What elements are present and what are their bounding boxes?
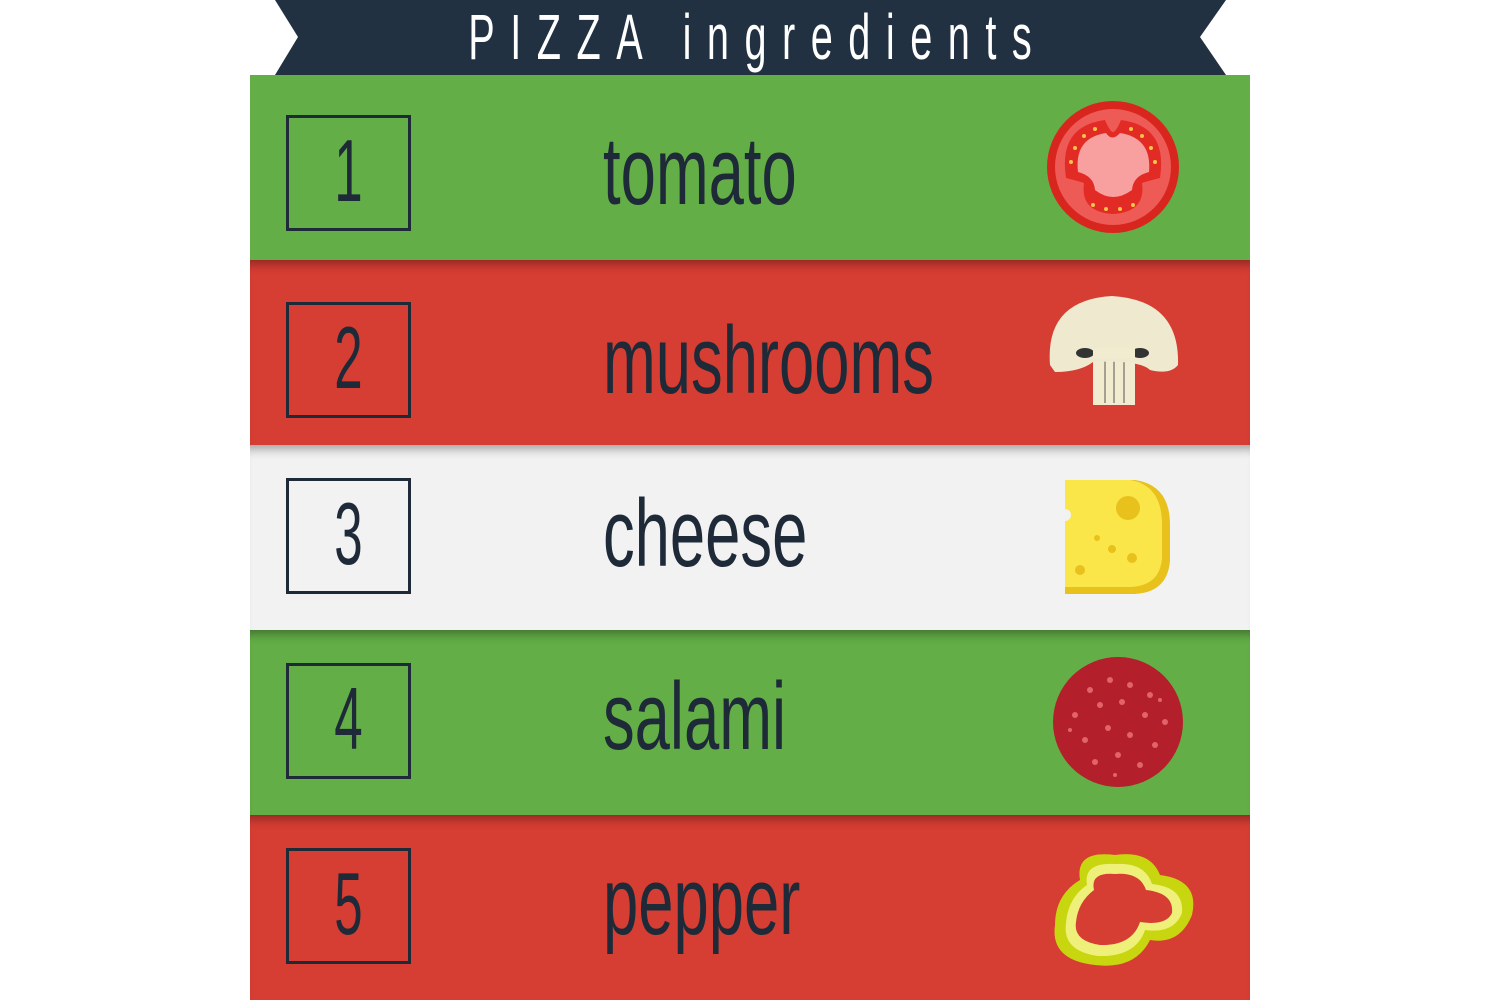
row 3: cheese [250, 445, 1250, 630]
label tomato: tomato [603, 118, 797, 225]
label salami: salami [603, 663, 786, 770]
title text: PIZZA ingredients [468, 1, 1047, 73]
number box 4 [286, 663, 411, 779]
label cheese: cheese [603, 480, 807, 587]
icon: tomato [1047, 101, 1179, 233]
title banner [275, 0, 1226, 75]
icon: mushroom [1050, 296, 1178, 405]
icon: cheese [1065, 480, 1170, 594]
row 2: mushrooms [250, 260, 1250, 445]
number box 3 [286, 478, 411, 594]
label pepper: pepper [603, 848, 800, 955]
row 4: salami [250, 630, 1250, 815]
icon: salami [1053, 657, 1183, 787]
row 5: pepper [250, 815, 1250, 1000]
number box 5 [286, 848, 411, 964]
number box 1: 1 [334, 121, 363, 220]
icon: pepper [1054, 854, 1194, 966]
label mushrooms: mushrooms [603, 307, 934, 414]
number box 4: 4 [334, 669, 363, 768]
number box 1 [286, 115, 411, 231]
number box 2: 2 [334, 308, 363, 407]
number box 3: 3 [334, 484, 363, 583]
number box 2 [286, 302, 411, 418]
number box 5: 5 [334, 854, 363, 953]
row 1: tomato [250, 75, 1250, 260]
